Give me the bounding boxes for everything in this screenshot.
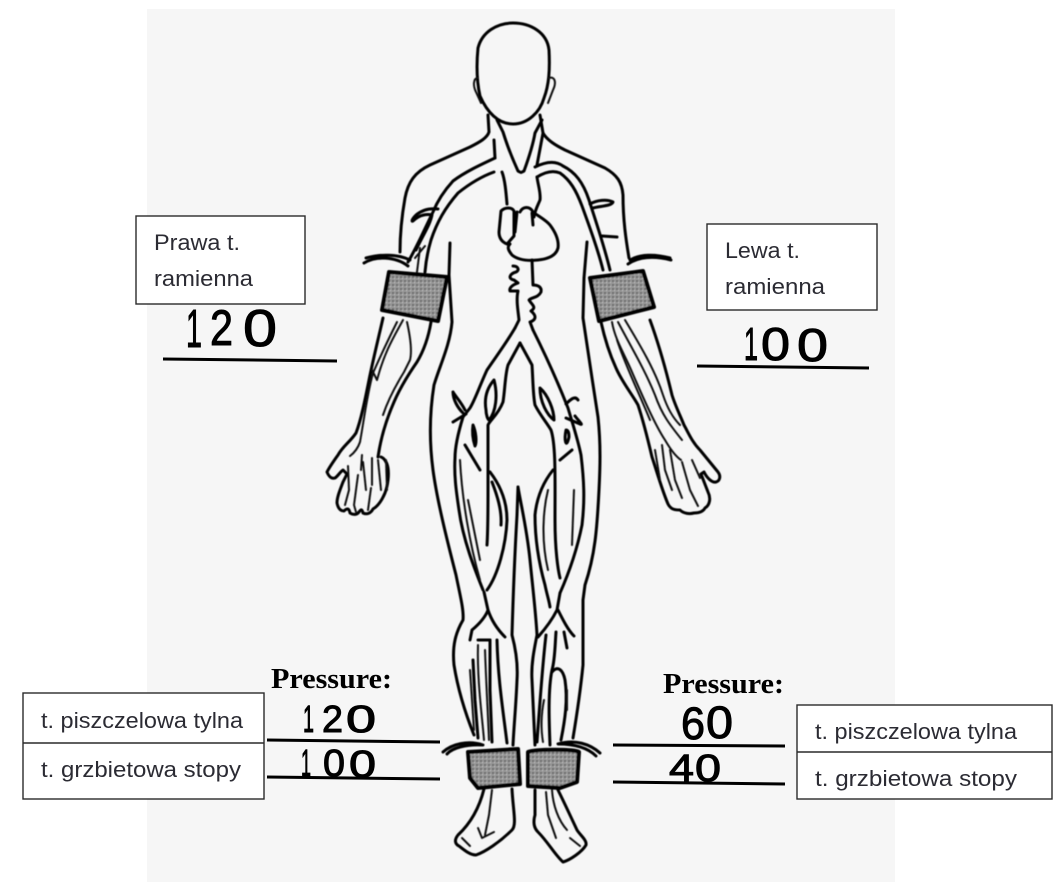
body figure bbox=[327, 23, 720, 862]
label box: left brachial artery bbox=[707, 224, 877, 310]
lower leg arteries, viewer left bbox=[470, 640, 507, 743]
neck arteries bbox=[494, 120, 543, 172]
cuff: left arm bbox=[590, 255, 671, 321]
values: right leg 120 over 100: 1 bbox=[301, 743, 311, 785]
values: left leg 60 over 40: 0 bbox=[695, 748, 721, 790]
pressure heading: left leg: Pressure: bbox=[663, 668, 784, 700]
values: left leg 60 over 40 bbox=[613, 697, 785, 790]
label box: right leg arteries: t. grzbietowa stopy bbox=[41, 757, 241, 782]
label box: right brachial artery: Prawa t. bbox=[154, 230, 240, 255]
icon: heart bbox=[499, 172, 558, 260]
arteries of the chest and arms bbox=[408, 158, 617, 272]
arm blood pressure cuffs bbox=[364, 255, 671, 321]
icon: left foot bbox=[534, 790, 586, 862]
abdominal and thigh arteries, viewer left bbox=[453, 328, 520, 640]
abdominal and thigh arteries, viewer right bbox=[520, 330, 584, 648]
inner legs bbox=[512, 487, 537, 745]
label box: left leg arteries: t. grzbietowa stopy bbox=[815, 766, 1017, 791]
value: right brachial 120: 2 bbox=[210, 300, 233, 356]
descending aorta bbox=[510, 260, 541, 330]
cuff: left ankle bbox=[528, 742, 600, 788]
right arm of figure (viewer left) bbox=[327, 318, 431, 514]
label box: right brachial artery: ramienna bbox=[154, 266, 254, 291]
values: left leg 60 over 40: 6 bbox=[681, 698, 705, 749]
values: right leg 120 over 100: 0 bbox=[346, 699, 376, 741]
icon: right foot bbox=[455, 789, 514, 855]
pressure heading: right leg: Pressure: bbox=[271, 663, 392, 695]
paper background bbox=[147, 9, 895, 882]
cuff: right arm bbox=[364, 255, 447, 321]
value: right brachial 120: 1 bbox=[186, 299, 202, 359]
value: left brachial 100: 1 bbox=[744, 318, 758, 370]
values: right leg 120 over 100: 0 bbox=[349, 744, 376, 786]
label box: left leg arteries bbox=[797, 705, 1052, 799]
cuff: right ankle bbox=[443, 743, 520, 788]
value: left brachial 100 bbox=[697, 318, 869, 371]
value: left brachial 100: 0 bbox=[761, 318, 790, 370]
value: left brachial 100: 0 bbox=[797, 319, 828, 371]
ankle cuffs bbox=[443, 742, 600, 788]
label box: left leg arteries: t. piszczelowa tylna bbox=[815, 719, 1018, 744]
values: right leg 120 over 100: 0 bbox=[323, 743, 345, 785]
lower leg arteries, viewer right bbox=[537, 632, 567, 745]
label box: right brachial artery bbox=[136, 216, 305, 304]
values: left leg 60 over 40: 4 bbox=[669, 748, 694, 790]
left arm of figure (viewer right) bbox=[601, 320, 720, 514]
label box: left brachial artery: Lewa t. bbox=[725, 238, 800, 263]
torso and shoulders outline bbox=[400, 115, 629, 738]
values: right leg 120 over 100: 2 bbox=[322, 699, 343, 741]
label box: right leg arteries bbox=[23, 693, 264, 799]
values: left leg 60 over 40: 0 bbox=[706, 697, 733, 748]
value: right brachial 120: 0 bbox=[243, 300, 277, 358]
values: right leg 120 over 100 bbox=[267, 699, 440, 786]
label box: right leg arteries: t. piszczelowa tylna bbox=[41, 708, 244, 733]
value: right brachial 120 bbox=[163, 299, 337, 361]
values: right leg 120 over 100: 1 bbox=[303, 699, 314, 741]
label box: left brachial artery: ramienna bbox=[725, 274, 826, 299]
head bbox=[474, 23, 555, 124]
